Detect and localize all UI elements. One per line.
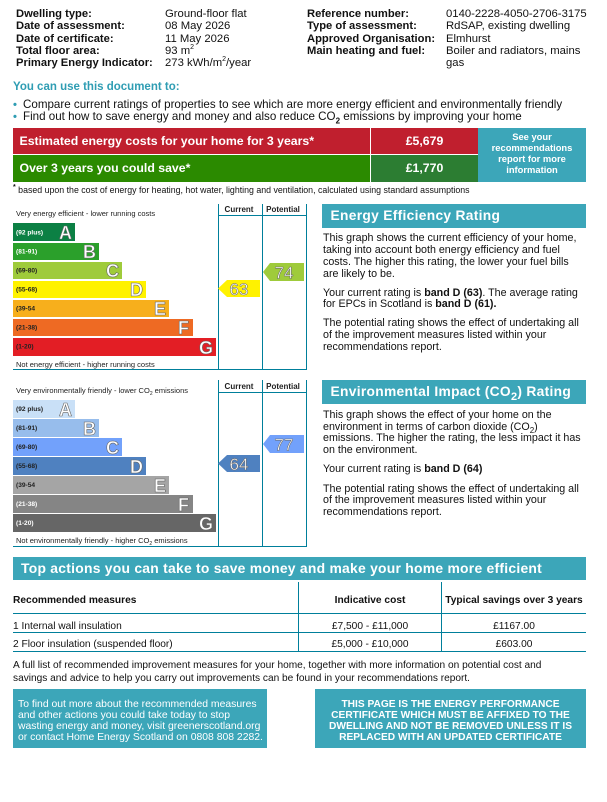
callout: find out more [13, 689, 267, 748]
recommendations note [478, 128, 586, 182]
text: environmental impact explanation: of the improvement measures listed within your [323, 494, 546, 506]
dwelling details left column: Ground-floor flat [165, 8, 247, 20]
chart: environmental impact rating: (81-91) [16, 425, 37, 432]
dwelling details left column: 93 m2 [165, 44, 194, 57]
text: environmental impact explanation: The potential rating shows the effect of undertaking all [323, 483, 579, 495]
chart: environmental impact rating: D [130, 457, 143, 477]
dwelling details left column: Total floor area: [16, 45, 100, 57]
chart: energy efficiency rating: Current [225, 205, 254, 214]
chart: environmental impact rating: emissions [152, 536, 188, 545]
chart: environmental impact rating: 77 [275, 436, 293, 454]
chart: environmental impact rating: (1-20) [16, 520, 34, 527]
chart: environmental impact rating: C [106, 438, 119, 458]
recommendations note: See your [512, 130, 552, 142]
panel: energy costs [13, 128, 586, 182]
row: internal wall insulation: 1 Internal wall insulation [13, 620, 122, 632]
reference details right column: Reference number: [307, 8, 409, 20]
heading: environmental impact rating: Environmental Impact (CO2) Rating [330, 384, 571, 403]
reference details right column: Type of assessment: [307, 20, 417, 32]
chart: energy efficiency rating: Not energy efficient - higher running costs [16, 360, 155, 369]
callout: find out more: To find out more about the recommended measures [18, 698, 257, 710]
chart: energy efficiency rating: (55-68) [16, 286, 37, 294]
savings label [13, 155, 370, 182]
chart: energy efficiency rating: (69-80) [16, 268, 37, 274]
dwelling details left column: 08 May 2026 [165, 20, 230, 32]
chart: environmental impact rating: (69-80) [16, 444, 37, 451]
chart: environmental impact rating: A [59, 400, 72, 420]
heading: you can use this document: You can use this document to: [13, 81, 180, 93]
callout: certificate notice: DWELLING AND NOT BE REMOVED UNLESS IT IS [329, 720, 572, 732]
bullet list of uses: Compare current ratings of properties to see which are more energy efficient and environmentally friendly [23, 98, 562, 111]
reference details right column: gas [446, 57, 464, 69]
text: full list of measures: A full list of recommended improvement measures for your home, together with more information on potential cost and [13, 660, 541, 671]
bullet list of uses: • [13, 99, 17, 111]
text: environmental impact explanation: on the environment. [323, 444, 417, 456]
chart: environmental impact rating: Not environmentally friendly - higher CO [16, 536, 149, 545]
text: energy efficiency explanation: costs. The higher this rating, the lower your fuel bills [323, 256, 569, 268]
chart: energy efficiency rating: (21-38) [16, 324, 37, 332]
text: energy efficiency explanation: This graph shows the current efficiency of your home, [323, 232, 576, 244]
savings label: Over 3 years you could save* [20, 161, 190, 175]
chart: energy efficiency rating: 74 [275, 264, 293, 282]
dwelling details left column: Date of certificate: [16, 33, 114, 45]
chart: energy efficiency rating: A [59, 223, 72, 243]
text: environmental impact explanation: This graph shows the effect of your home on the [323, 409, 552, 421]
table header: Recommended measures [13, 595, 136, 606]
callout: find out more: wasting energy and money, visit greenerscotland.org [18, 720, 260, 732]
heading: energy efficiency rating: Energy Efficiency Rating [330, 208, 500, 223]
dwelling details left column: 11 May 2026 [165, 33, 229, 45]
chart: energy efficiency rating: Very energy efficient - lower running costs [16, 209, 155, 218]
footnote: * based upon the cost of energy for heating, hot water, lighting and ventilation, calculated using standard assumptions [13, 184, 470, 195]
bullet list of uses: • [13, 111, 17, 123]
callout: certificate notice: CERTIFICATE WHICH MUST BE AFFIXED TO THE [331, 710, 570, 720]
chart: energy efficiency rating: 63 [230, 280, 248, 299]
estimated costs value: £5,679 [406, 134, 443, 148]
callout: find out more: and other actions you could take today to stop [18, 710, 230, 720]
chart: environmental impact rating: (55-68) [16, 463, 37, 470]
chart: energy efficiency rating: F [178, 318, 189, 338]
reference details right column: Boiler and radiators, mains [446, 45, 580, 57]
bullet list of uses [13, 98, 562, 125]
chart: environmental impact rating: E [154, 476, 166, 496]
reference details right column: RdSAP, existing dwelling [446, 20, 570, 32]
chart: energy efficiency rating: (39-54 [16, 306, 35, 312]
chart: environmental impact rating: 2 [149, 541, 152, 547]
chart: energy efficiency rating: (81-91) [16, 248, 37, 256]
row: internal wall insulation [13, 620, 535, 632]
text: energy efficiency explanation: taking into account both energy efficiency and fuel [323, 244, 560, 256]
text: energy efficiency explanation: of the improvement measures listed within your [323, 329, 546, 341]
dwelling details left column: Date of assessment: [16, 20, 125, 32]
heading: energy efficiency rating [322, 204, 586, 228]
text: full list of measures [13, 660, 541, 684]
chart: environmental impact rating: F [178, 495, 189, 515]
recommendations note: recommendations [492, 142, 572, 153]
heading: top actions [13, 557, 586, 580]
chart: energy efficiency rating: B [83, 242, 96, 262]
reference details right column: Approved Organisation: [307, 33, 435, 45]
text: energy efficiency explanation: are likely to be. [323, 268, 395, 280]
callout: certificate notice: THIS PAGE IS THE ENERGY PERFORMANCE [341, 698, 560, 710]
table header [13, 595, 583, 606]
text: environmental impact explanation [323, 409, 581, 518]
chart: energy efficiency rating: Potential [266, 205, 300, 214]
text: full list of measures: savings and advice to help you carry out improvements can be found in your recommendations report. [13, 672, 470, 684]
chart: environmental impact rating: Potential [266, 382, 300, 391]
chart: environmental impact rating: B [83, 419, 96, 439]
chart: environmental impact rating: (92 plus) [16, 406, 43, 413]
text: energy efficiency explanation: for EPCs in Scotland is band D (61). [323, 298, 496, 310]
table: recommended measures [13, 582, 586, 652]
chart: environmental impact rating: Current [225, 382, 254, 391]
savings value [371, 155, 478, 182]
chart: environmental impact rating: 64 [230, 455, 248, 474]
row: floor insulation: 2 Floor insulation (suspended floor) [13, 638, 173, 650]
chart: environmental impact rating: 2 [150, 391, 153, 397]
chart: environmental impact rating: emissions [153, 386, 188, 395]
row: internal wall insulation: £7,500 - £11,000 [332, 620, 408, 632]
chart: energy efficiency rating: E [154, 299, 166, 319]
reference details right column: 0140-2228-4050-2706-3175 [446, 8, 587, 20]
chart: environmental impact rating: (39-54 [16, 482, 35, 489]
dwelling details left column: 273 kWh/m2/year [165, 56, 251, 69]
estimated costs label [13, 128, 370, 154]
reference details right column [307, 8, 587, 69]
text: environmental impact explanation: environment in terms of carbon dioxide (CO2) [323, 421, 538, 435]
dwelling details left column: Dwelling type: [16, 8, 92, 20]
reference details right column: Elmhurst [446, 33, 491, 45]
callout: certificate notice [315, 689, 586, 748]
text: environmental impact explanation: Your current rating is band D (64) [323, 463, 482, 475]
text: energy efficiency explanation: recommendations report. [323, 341, 442, 353]
chart: environmental impact rating: G [199, 514, 213, 534]
callout: find out more: or contact Home Energy Scotland on 0808 808 2282. [18, 732, 263, 742]
estimated costs label: Estimated energy costs for your home for 3 years* [20, 134, 314, 148]
callout: certificate notice: REPLACED WITH AN UPDATED CERTIFICATE [339, 732, 562, 742]
chart: environmental impact rating: Very environmentally friendly - lower CO [16, 386, 150, 395]
chart: energy efficiency rating: D [130, 280, 143, 300]
chart: energy efficiency rating: (92 plus) [16, 230, 43, 236]
bullet list of uses: Find out how to save energy and money and also reduce CO2 emissions by improving your home [23, 110, 522, 125]
dwelling details left column [16, 8, 251, 69]
recommendations note: information [506, 164, 558, 175]
text: environmental impact explanation: recommendations report. [323, 506, 442, 518]
row: internal wall insulation: £1167.00 [493, 620, 535, 632]
property details [16, 8, 587, 69]
savings value: £1,770 [406, 161, 443, 175]
heading: top actions: Top actions you can take to save money and make your home more efficient [21, 560, 542, 576]
row: floor insulation [13, 638, 532, 650]
row: floor insulation: £5,000 - £10,000 [331, 638, 409, 650]
row: floor insulation: £603.00 [496, 638, 532, 650]
chart: energy efficiency rating: C [106, 261, 119, 281]
text: environmental impact explanation: emissions. The higher the rating, the less impact it has [323, 432, 581, 444]
reference details right column: Main heating and fuel: [307, 45, 425, 57]
text: energy efficiency explanation [323, 232, 579, 353]
chart: energy efficiency rating: G [199, 338, 213, 358]
estimated costs value [371, 128, 478, 154]
text: energy efficiency explanation: The potential rating shows the effect of undertaking all [323, 317, 579, 329]
table header: Indicative cost [335, 595, 405, 606]
dwelling details left column: Primary Energy Indicator: [16, 57, 153, 69]
text: energy efficiency explanation: Your current rating is band D (63). The average rating [323, 287, 578, 299]
recommendations note: report for more [498, 153, 566, 164]
table header: Typical savings over 3 years [445, 595, 583, 606]
chart: environmental impact rating: (21-38) [16, 501, 37, 508]
chart: energy efficiency rating: (1-20) [16, 344, 34, 350]
